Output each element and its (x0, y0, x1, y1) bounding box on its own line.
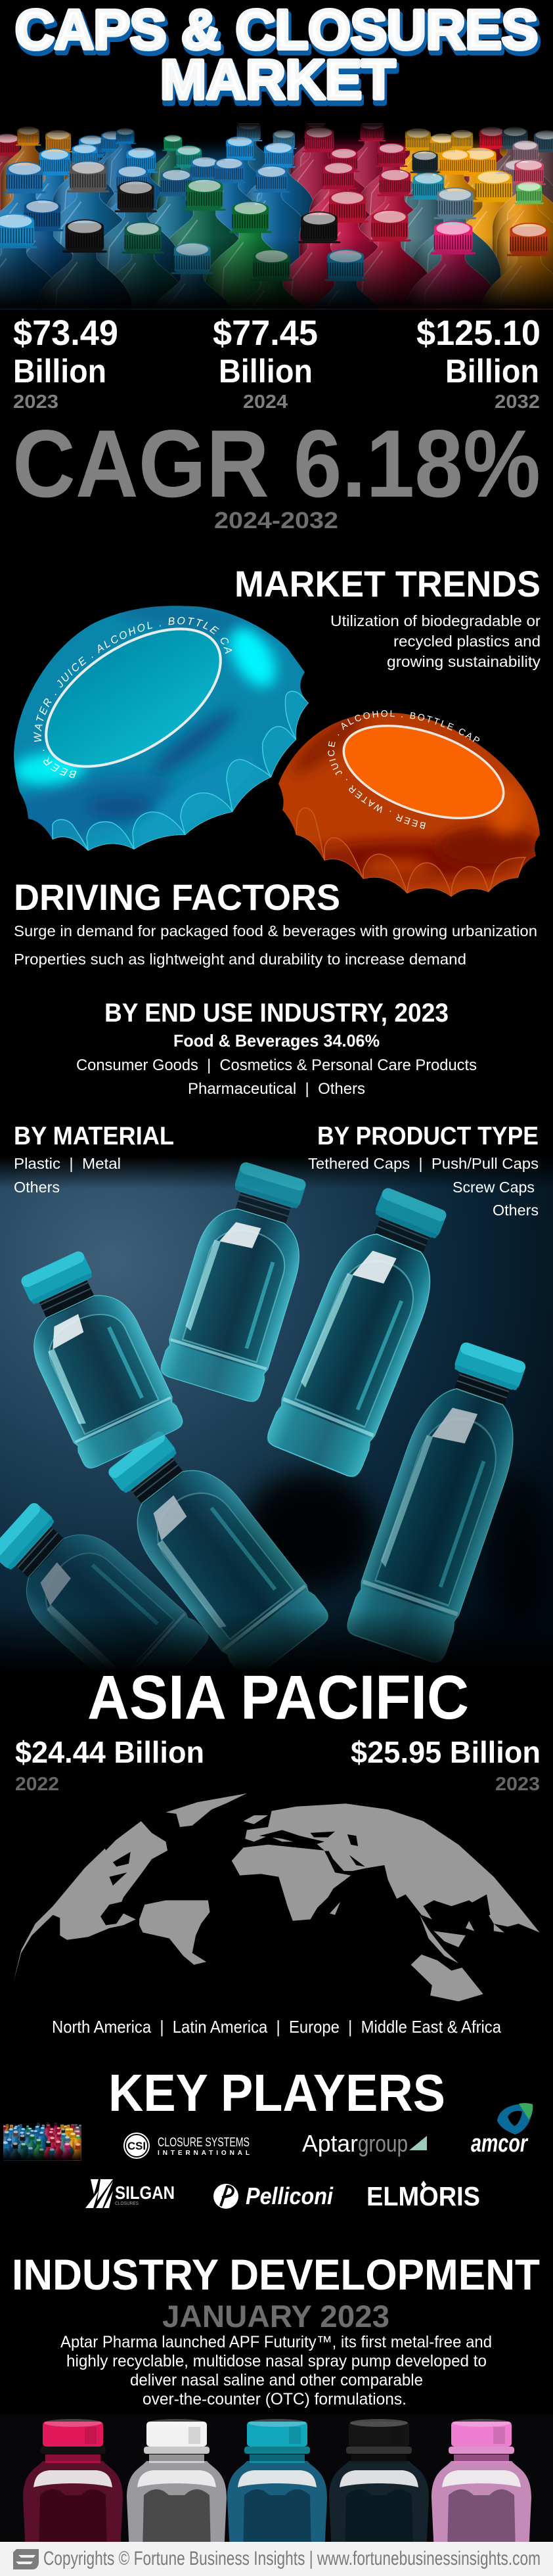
market value stats (13, 313, 541, 413)
product type segments: Others (493, 1202, 539, 1219)
logo: aptargroup: group (358, 2130, 408, 2157)
heading: by material: BY MATERIAL (14, 1122, 174, 1150)
driving factors text: Surge in demand for packaged food & beverages with growing urbanization (14, 922, 537, 939)
logo: closure systems international: CSI (127, 2140, 146, 2152)
logo: pelliconi (213, 2182, 334, 2209)
cap flutes (53, 691, 309, 851)
title: CAPS & CLOSURES (15, 0, 538, 60)
market trends text: recycled plastics and (393, 633, 541, 650)
market trends text: growing sustainability (387, 653, 541, 670)
logo: elmoris: ELMORIS (366, 2181, 480, 2211)
other regions: North America | Latin America | Europe | Middle East & Africa (52, 2017, 501, 2037)
stat: 2023: Billion (13, 353, 106, 390)
stat: asia pacific 2023 (351, 1735, 541, 1795)
heading: asia pacific: ASIA PACIFIC (87, 1663, 469, 1732)
stat: 2024 (213, 313, 318, 413)
bottle: top right (267, 1188, 447, 1478)
stat: 2024: $77.45 (213, 313, 318, 353)
heading: by end use industry: BY END USE INDUSTRY, 2023 (104, 999, 449, 1028)
world map globe (13, 1794, 540, 2001)
by product type (308, 1122, 539, 1219)
development description: Aptar Pharma launched APF Futurity™, its first metal-free and (60, 2333, 492, 2351)
end use segments: Consumer Goods | Cosmetics & Personal Care Products (76, 1056, 477, 1074)
product type segments: Screw Caps (453, 1179, 535, 1196)
heading: market trends: MARKET TRENDS (234, 563, 541, 604)
logo: silgan closures (85, 2179, 175, 2208)
logos (0, 2103, 533, 2211)
development date: JANUARY 2023 (162, 2299, 389, 2334)
heading: key players: KEY PLAYERS (108, 2064, 445, 2122)
stat: asia pacific 2022: 2022 (15, 1774, 59, 1795)
logo: closure systems international: CLOSURE SYSTEMS (158, 2136, 250, 2150)
logo: silgan closures: CLOSURES (115, 2202, 139, 2206)
stat: asia pacific 2022 (15, 1735, 204, 1795)
logo: closure systems international: INTERNATIONAL (158, 2150, 250, 2157)
logo: aptargroup: Aptar (302, 2130, 358, 2157)
stat: 2032: $125.10 (416, 313, 541, 353)
stat: asia pacific 2023: 2023 (495, 1774, 540, 1795)
bottom bottles row (0, 2414, 553, 2553)
bottle: far right (347, 1342, 525, 1663)
material segments (14, 1155, 121, 1196)
development description: over-the-counter (OTC) formulations. (143, 2390, 407, 2408)
logo: pelliconi: Pelliconi (246, 2182, 334, 2209)
heading: driving factors: DRIVING FACTORS (14, 876, 340, 918)
logo: amcor: amcor (471, 2130, 529, 2158)
logo: closure systems international (123, 2132, 250, 2159)
development description (60, 2333, 492, 2408)
stat: 2032: Billion (445, 353, 539, 390)
CAGR period: 2024-2032 (214, 508, 338, 533)
end use segments (76, 1056, 477, 1098)
icon: orange bottle cap: BEER . WATER . JUICE . ALCOHOL . BOTTLE CAP (328, 710, 479, 829)
footer bar (0, 2542, 553, 2576)
title: MARKET (162, 53, 397, 115)
title: MARKET (160, 49, 395, 110)
icon: blue bottle cap: BEER . WATER . JUICE . ALCOHOL . BOTTLE CAP (33, 617, 232, 778)
development description: deliver nasal saline and other comparable (130, 2371, 423, 2389)
driving factors text: Properties such as lightweight and durability to increase demand (14, 951, 466, 968)
material segments: Others (14, 1179, 60, 1196)
stat: 2023: $73.49 (13, 313, 118, 353)
cap flutes (296, 808, 525, 897)
icon: orange bottle cap (278, 710, 540, 897)
bottle: lower middle (108, 1432, 328, 1667)
stat: 2024: Billion (219, 353, 313, 390)
bottle: black (329, 2419, 429, 2553)
logo: bottles thumbnail (0, 2123, 85, 2187)
material segments: Plastic | Metal (14, 1155, 121, 1172)
title (15, 0, 540, 115)
driving factors text (14, 922, 537, 968)
stat: 2023: 2023 (13, 392, 58, 413)
bottle: top middle (160, 1162, 306, 1402)
market trends text: Utilization of biodegradable or (330, 612, 541, 629)
bottle: teal (227, 2419, 327, 2553)
logo: silgan closures: SILGAN (115, 2182, 175, 2203)
leading segment: Food & Beverages 34.06% (173, 1031, 380, 1051)
hero image: coloured bottles (0, 121, 553, 443)
title: CAPS & CLOSURES (17, 3, 540, 64)
stat: 2024: 2024 (243, 392, 288, 413)
bottle: top left (21, 1251, 183, 1469)
by material (14, 1122, 174, 1196)
logo: amcor (471, 2103, 533, 2158)
market trends text (330, 612, 541, 670)
bottle: crimson (23, 2419, 123, 2553)
end use segments: Pharmaceutical | Others (188, 1080, 365, 1098)
bottle: white (127, 2419, 227, 2553)
stat: asia pacific 2022: $24.44 Billion (15, 1735, 204, 1769)
stat: 2032: 2032 (495, 392, 540, 413)
stat: asia pacific 2023: $25.95 Billion (351, 1735, 541, 1769)
footer logo (13, 2549, 39, 2569)
development description: highly recyclable, multidose nasal spray pump developed to (66, 2352, 487, 2370)
bottle: lower left (0, 1503, 209, 1666)
logo: aptargroup (302, 2130, 427, 2157)
bottle: pink (431, 2419, 531, 2553)
heading: by product type: BY PRODUCT TYPE (317, 1122, 539, 1150)
product type segments (308, 1155, 539, 1219)
stat: 2023 (13, 313, 118, 413)
stat: 2032 (416, 313, 541, 413)
icon: blue bottle cap (14, 606, 309, 851)
product type segments: Tethered Caps | Push/Pull Caps (308, 1155, 539, 1172)
teal bottles photo (0, 1156, 553, 1714)
